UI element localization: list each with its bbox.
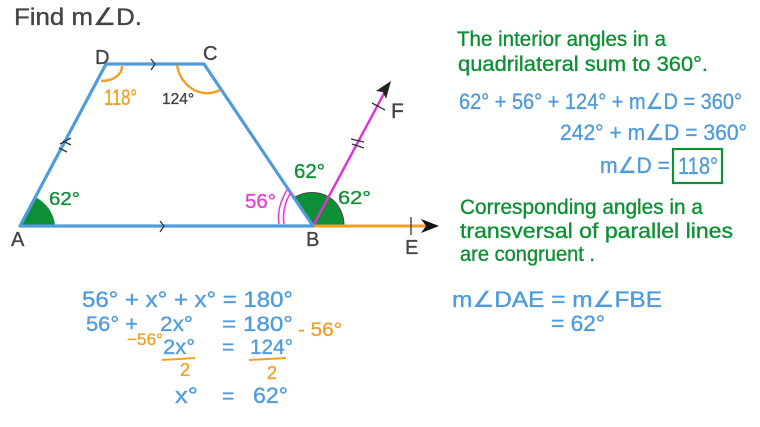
- filled angles at B: [295, 192, 344, 226]
- algebra working: = 180°: [222, 313, 293, 336]
- answer box: [673, 149, 722, 183]
- angle labels: 118°: [104, 85, 137, 110]
- double angle arc at B: [278, 190, 291, 224]
- explanation: interior angles: The interior angles in a: [457, 28, 666, 51]
- angle sum working: 118°: [678, 153, 718, 180]
- angle labels: 62°: [294, 161, 325, 183]
- explanation: corresponding angles: [460, 196, 733, 266]
- explanation: corresponding angles: transversal of parallel lines: [460, 220, 733, 243]
- algebra working: =: [222, 336, 234, 359]
- algebra working: [82, 287, 342, 408]
- point labels: D: [95, 47, 109, 69]
- angle labels: 124°: [162, 91, 194, 108]
- explanation: interior angles: quadrilateral sum to 360°.: [458, 53, 708, 76]
- angle arc at D: [101, 66, 122, 81]
- algebra working: 2x°: [163, 336, 195, 359]
- corresponding angle working: = 62°: [551, 311, 605, 336]
- algebra working: 124°: [250, 336, 293, 359]
- angle sum working: 242° + m∠D = 360°: [560, 120, 747, 145]
- angle labels: [49, 85, 371, 213]
- parallel marks: [59, 59, 164, 232]
- algebra working: =: [222, 385, 234, 408]
- angle labels: 62°: [338, 188, 371, 208]
- algebra working: 56° + x° + x° = 180°: [82, 287, 293, 312]
- point labels: B: [306, 229, 319, 251]
- explanation: corresponding angles: Corresponding angles in a: [460, 196, 703, 219]
- title: Find m∠D.: [14, 4, 142, 31]
- algebra working: 62°: [253, 383, 288, 408]
- algebra working: 2: [180, 360, 190, 380]
- explanation: interior angles: [457, 28, 708, 76]
- point labels: C: [203, 43, 217, 65]
- point labels: E: [405, 237, 418, 259]
- filled angle at A: [20, 197, 55, 226]
- angle labels: 56°: [245, 191, 276, 213]
- algebra working: x°: [175, 383, 198, 408]
- algebra working: −56°: [127, 330, 163, 349]
- point labels: [11, 43, 418, 259]
- corresponding angle working: [452, 287, 662, 336]
- ray BE: [313, 217, 439, 235]
- angle sum working: [459, 89, 747, 180]
- explanation: corresponding angles: are congruent .: [460, 243, 595, 266]
- trapezoid ABCD: [20, 64, 313, 226]
- algebra working: 2x°: [160, 313, 193, 336]
- angle sum working: m∠D =: [600, 153, 670, 178]
- angle labels: 62°: [49, 189, 80, 209]
- algebra working: - 56°: [298, 320, 342, 341]
- geometry diagram: [11, 43, 439, 259]
- algebra working: 56° +: [86, 313, 138, 336]
- point labels: A: [11, 229, 25, 251]
- algebra working: 2: [267, 363, 277, 383]
- transversal ray BF: [313, 81, 391, 226]
- corresponding angle working: m∠DAE = m∠FBE: [452, 287, 662, 312]
- point labels: F: [391, 100, 404, 123]
- angle arc at C: [177, 65, 220, 93]
